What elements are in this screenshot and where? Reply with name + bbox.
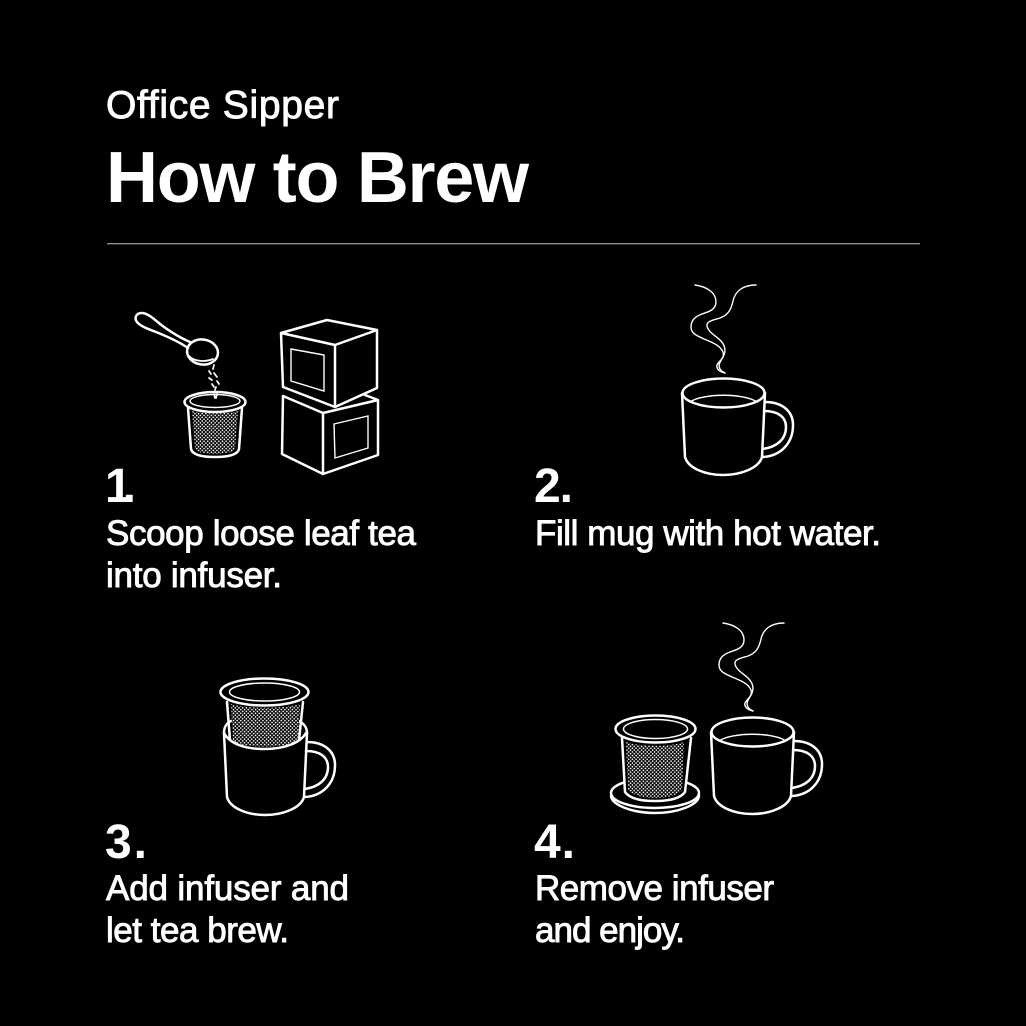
icon: upper tea box bbox=[281, 320, 377, 407]
step 4 illustration bbox=[611, 623, 822, 814]
step 2 illustration bbox=[682, 285, 793, 475]
icon: mug bbox=[682, 378, 793, 475]
step 3 illustration bbox=[220, 678, 335, 815]
icon: mug bbox=[711, 718, 822, 814]
step 2 number: 2. bbox=[534, 460, 573, 513]
step 4 number: 4. bbox=[534, 816, 575, 869]
icon: infuser on saucer bbox=[616, 716, 696, 801]
step 1 text: Scoop loose leaf tea bbox=[106, 514, 417, 553]
step 4 text: and enjoy. bbox=[535, 911, 685, 950]
step 1 text: into infuser. bbox=[106, 556, 282, 595]
step 3 text: let tea brew. bbox=[106, 911, 289, 950]
icon: tea leaves falling bbox=[209, 365, 219, 398]
step 2 text: Fill mug with hot water. bbox=[535, 514, 881, 553]
icon: saucer bbox=[611, 778, 699, 813]
icon: lower tea box bbox=[282, 395, 378, 474]
icon: infuser in mug bbox=[220, 678, 308, 749]
step 1 illustration bbox=[136, 313, 378, 474]
icon: steam bbox=[691, 285, 756, 373]
step 3 number: 3. bbox=[105, 816, 147, 869]
icon: spoon bbox=[136, 313, 220, 367]
step 3 text: Add infuser and bbox=[106, 869, 349, 908]
step 1 number: 1. bbox=[105, 460, 136, 513]
icon: infuser bbox=[184, 392, 246, 457]
step 4 text: Remove infuser bbox=[535, 869, 774, 908]
icon: steam bbox=[719, 623, 784, 711]
icon: mug with infuser bbox=[224, 721, 335, 815]
title: How to Brew bbox=[106, 138, 530, 218]
subtitle: Office Sipper bbox=[106, 84, 339, 127]
